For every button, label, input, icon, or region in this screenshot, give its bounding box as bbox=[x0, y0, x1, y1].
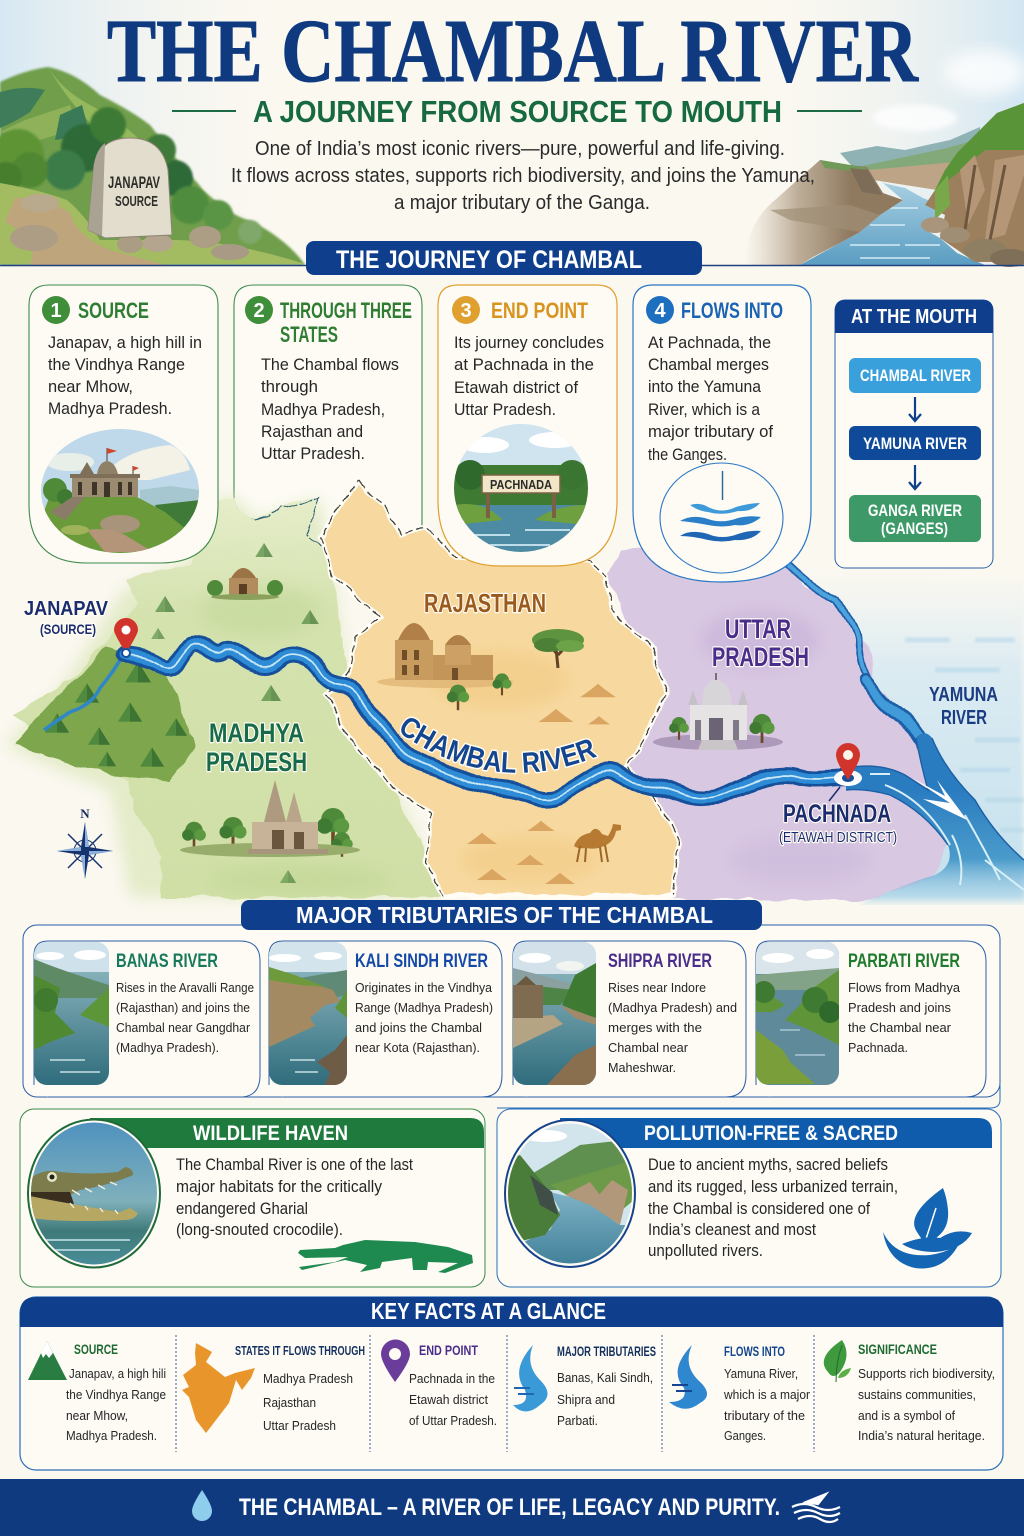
map label: Pachnada: (ETAWAH DISTRICT) bbox=[779, 829, 897, 846]
card: Banas River: Rises in the Aravalli Range bbox=[116, 980, 254, 995]
fact: tributaries: Shipra and bbox=[557, 1393, 615, 1407]
card 3: end point bbox=[438, 285, 617, 566]
map: state borders bbox=[320, 482, 679, 897]
map label: Janapav: (SOURCE) bbox=[40, 621, 96, 637]
box: Yamuna River bbox=[849, 426, 981, 460]
fact: end point: of Uttar Pradesh. bbox=[409, 1414, 497, 1428]
fact: end point: Pachnada in the bbox=[409, 1372, 495, 1386]
header scene: sky bbox=[0, 0, 1024, 265]
panel header: AT THE MOUTH bbox=[851, 306, 977, 328]
card: Kali Sindh River: and joins the Chambal bbox=[355, 1020, 482, 1035]
card: Shipra River: Maheshwar. bbox=[608, 1060, 676, 1075]
card: Kali Sindh River: near Kota (Rajasthan). bbox=[355, 1040, 480, 1055]
fact: states: Uttar Pradesh bbox=[263, 1419, 336, 1433]
fact: significance: and is a symbol of bbox=[858, 1409, 956, 1423]
text: the Chambal is considered one of bbox=[648, 1199, 870, 1218]
card 4: flows into: into the Yamuna bbox=[648, 377, 761, 396]
fact: flows into: tributary of the bbox=[724, 1409, 805, 1423]
map label: Rajasthan: RAJASTHAN bbox=[424, 588, 546, 618]
text: India’s cleanest and most bbox=[648, 1220, 816, 1239]
card 2: through three states bbox=[234, 285, 422, 535]
fact: flows into: Yamuna River, bbox=[724, 1367, 798, 1381]
text: and its rugged, less urbanized terrain, bbox=[648, 1177, 898, 1196]
card 1: source: the Vindhya Range bbox=[48, 355, 185, 374]
map label: Madhya Pradesh: MADHYA bbox=[209, 718, 304, 748]
panel: at the mouth bbox=[835, 300, 993, 568]
card: Shipra River: Chambal near bbox=[608, 1040, 689, 1055]
banner: the journey of Chambal: THE JOURNEY OF CHAMBAL bbox=[336, 246, 642, 274]
illustration: Janapav hill with stone bbox=[0, 67, 305, 265]
fact: significance: Supports rich biodiversity, bbox=[858, 1367, 995, 1381]
fact: tributaries bbox=[513, 1344, 656, 1428]
card: Shipra River: merges with the bbox=[608, 1020, 702, 1035]
card: Kali Sindh River: KALI SINDH RIVER bbox=[355, 951, 488, 972]
card 2: through three states: 2 bbox=[253, 300, 265, 322]
card 4: flows into: Chambal merges bbox=[648, 355, 769, 374]
card 2: through three states: through bbox=[261, 377, 318, 396]
card 3: end point: 3 bbox=[460, 300, 472, 322]
fact: source: Madhya Pradesh. bbox=[66, 1429, 157, 1443]
map label: Yamuna River: RIVER bbox=[941, 707, 987, 729]
river: Yamuna bbox=[790, 566, 924, 750]
card: Kali Sindh River: Range (Madhya Pradesh) bbox=[355, 1000, 493, 1015]
card 3: end point: Its journey concludes bbox=[454, 333, 604, 352]
fact: states: STATES IT FLOWS THROUGH bbox=[235, 1343, 365, 1358]
card 4: flows into: 4 bbox=[654, 300, 666, 322]
arrow bbox=[909, 465, 921, 489]
fact: end point bbox=[381, 1340, 497, 1428]
footer banner bbox=[0, 1479, 1024, 1536]
panel header bbox=[90, 1118, 484, 1148]
illustration: Janapav hill on map bbox=[15, 645, 195, 780]
illustration: gorge and river bbox=[745, 103, 1024, 267]
map texture blotches bbox=[200, 585, 870, 895]
icon: compass bbox=[57, 806, 113, 879]
fact: significance: sustains communities, bbox=[858, 1388, 976, 1402]
card 2: through three states: STATES bbox=[280, 322, 338, 347]
panel: wildlife haven bbox=[20, 1109, 485, 1287]
card: Banas River: (Madhya Pradesh). bbox=[116, 1040, 219, 1055]
card: Parbati River: Pradesh and joins bbox=[848, 1000, 951, 1015]
divider line under header bbox=[0, 264, 1024, 266]
fact: flows into bbox=[669, 1343, 810, 1443]
intro text: One of India’s most iconic rivers—pure, powerful and life-giving. bbox=[255, 138, 785, 160]
map label: Pachnada: PACHNADA bbox=[783, 800, 891, 828]
illustration: camel bbox=[574, 824, 621, 862]
card: Banas River: (Rajasthan) and joins the bbox=[116, 1000, 250, 1015]
fact: source: Janapav, a high hili bbox=[69, 1367, 166, 1381]
icon: leaf and water bbox=[883, 1188, 972, 1268]
panel: major tributaries bbox=[23, 900, 1000, 1108]
card 1: source bbox=[29, 285, 218, 563]
card: Banas River: Chambal near Gangdhar bbox=[116, 1020, 251, 1035]
card: Kali Sindh River: Originates in the Vindhya bbox=[355, 980, 493, 995]
card: Parbati River: the Chambal near bbox=[848, 1020, 952, 1035]
fact: states: Madhya Pradesh bbox=[263, 1372, 353, 1386]
card 1: source: Janapav, a high hill in bbox=[48, 333, 202, 352]
map label: Pachnada bbox=[779, 800, 897, 846]
panel header: KEY FACTS AT A GLANCE bbox=[371, 1298, 606, 1324]
map pin: Pachnada bbox=[829, 743, 862, 801]
panel header bbox=[20, 1297, 1003, 1327]
map: Uttar Pradesh region bbox=[607, 547, 948, 900]
panel: key facts at a glance bbox=[20, 1297, 1003, 1470]
intro text: It flows across states, supports rich biodiversity, and joins the Yamuna, bbox=[231, 165, 815, 187]
text: Due to ancient myths, sacred beliefs bbox=[648, 1155, 888, 1174]
fact: states: Rajasthan bbox=[263, 1396, 316, 1410]
map label: Uttar Pradesh bbox=[712, 614, 809, 672]
map label: Chambal River: CHAMBAL RIVER bbox=[400, 716, 598, 774]
fact: source bbox=[28, 1341, 166, 1443]
fact: source: the Vindhya Range bbox=[66, 1388, 166, 1402]
card: Shipra River: (Madhya Pradesh) and bbox=[608, 1000, 737, 1015]
fact: end point: END POINT bbox=[419, 1342, 478, 1358]
card: Banas River: BANAS RIVER bbox=[116, 951, 218, 972]
card: Shipra River: SHIPRA RIVER bbox=[608, 951, 712, 972]
card: Kali Sindh River bbox=[269, 941, 502, 1097]
fact: significance: SIGNIFICANCE bbox=[858, 1341, 937, 1357]
panel: pollution-free and sacred bbox=[497, 1109, 1001, 1287]
box: Ganga River: GANGA RIVER bbox=[868, 501, 962, 520]
box: Chambal River bbox=[849, 358, 981, 393]
map: Rajasthan region bbox=[320, 482, 679, 897]
card 2: through three states: Madhya Pradesh, bbox=[261, 400, 385, 419]
card 3: end point: END POINT bbox=[491, 298, 588, 323]
subtitle: A JOURNEY FROM SOURCE TO MOUTH bbox=[253, 94, 782, 129]
box: Chambal River: CHAMBAL RIVER bbox=[860, 366, 971, 385]
intro text bbox=[231, 138, 815, 214]
icon: water waves bbox=[660, 463, 783, 573]
text: endangered Gharial bbox=[176, 1199, 308, 1218]
map label: Yamuna River bbox=[929, 684, 998, 729]
card 1: source: Madhya Pradesh. bbox=[48, 399, 172, 418]
card 4: flows into: FLOWS INTO bbox=[681, 298, 783, 323]
map pin: source bbox=[114, 618, 138, 657]
image: gorge bbox=[505, 1120, 635, 1268]
fact: significance: India’s natural heritage. bbox=[858, 1429, 985, 1443]
illustration: savanna tree bbox=[532, 629, 584, 668]
map label: Madhya Pradesh bbox=[206, 718, 307, 777]
card 4: flows into bbox=[633, 285, 811, 582]
illustration: desert dunes bbox=[467, 684, 616, 884]
text bbox=[176, 1155, 413, 1239]
illustration: Rajasthan fort bbox=[377, 623, 513, 710]
fact: states bbox=[182, 1343, 365, 1433]
fact: significance bbox=[824, 1340, 995, 1443]
fact: flows into: which is a major bbox=[723, 1388, 810, 1402]
text: The Chambal River is one of the last bbox=[176, 1155, 413, 1174]
card: Shipra River: Rises near Indore bbox=[608, 980, 706, 995]
fact: tributaries: Parbati. bbox=[557, 1414, 598, 1428]
card: Banas River bbox=[34, 941, 260, 1097]
illustration: small temple bbox=[207, 568, 283, 600]
map label: Uttar Pradesh: UTTAR bbox=[725, 614, 791, 644]
image: Pachnada sign bbox=[454, 424, 588, 555]
arrow bbox=[909, 397, 921, 421]
river: delta confluence bbox=[846, 733, 1024, 905]
image: gharial bbox=[28, 1120, 162, 1268]
fact: flows into: Ganges. bbox=[724, 1429, 766, 1443]
box: Ganga River: (GANGES) bbox=[881, 519, 948, 538]
card: Parbati River bbox=[753, 941, 986, 1097]
fact: tributaries: Banas, Kali Sindh, bbox=[557, 1371, 653, 1385]
fact: flows into: FLOWS INTO bbox=[724, 1343, 785, 1359]
fact: tributaries: MAJOR TRIBUTARIES bbox=[557, 1344, 656, 1359]
illustration: scattered shrubs in Madhya Pradesh bbox=[151, 543, 319, 883]
map: Madhya Pradesh region bbox=[13, 498, 444, 897]
card 1: source: near Mhow, bbox=[48, 377, 133, 396]
panel header: POLLUTION-FREE & SACRED bbox=[644, 1122, 898, 1145]
illustration: Uttar Pradesh white temple bbox=[653, 673, 783, 750]
card 4: flows into: the Ganges. bbox=[648, 445, 727, 464]
card 4: flows into: At Pachnada, the bbox=[648, 333, 771, 352]
card 4: flows into: major tributary of bbox=[648, 422, 773, 441]
text: unpolluted rivers. bbox=[648, 1241, 763, 1260]
card: Parbati River: Pachnada. bbox=[848, 1040, 908, 1055]
stone marker: JANAPAV bbox=[108, 173, 160, 192]
fact: source: near Mhow, bbox=[66, 1409, 128, 1423]
text bbox=[648, 1155, 898, 1260]
intro text: a major tributary of the Ganga. bbox=[394, 192, 650, 214]
card 1: source: SOURCE bbox=[78, 298, 149, 323]
card 2: through three states: Rajasthan and bbox=[261, 422, 363, 441]
map: Madhya Pradesh pale wash bbox=[5, 497, 444, 897]
map: sea / Yamuna waters bbox=[790, 565, 1024, 900]
fact: end point: Etawah district bbox=[409, 1393, 489, 1407]
icon: waves bbox=[792, 1494, 840, 1522]
card 2: through three states: THROUGH THREE bbox=[280, 298, 412, 323]
stone marker: SOURCE bbox=[115, 193, 158, 210]
map label: Madhya Pradesh: PRADESH bbox=[206, 747, 307, 777]
card 1: source: 1 bbox=[50, 300, 62, 322]
illustration: Madhya Pradesh temple bbox=[180, 780, 360, 857]
map: Madhya Pradesh top border bbox=[257, 498, 330, 557]
river: Chambal bbox=[124, 643, 850, 799]
image: Pachnada sign: PACHNADA bbox=[490, 478, 552, 492]
card 3: end point: at Pachnada in the bbox=[454, 355, 594, 374]
card 2: through three states: The Chambal flows bbox=[261, 355, 399, 374]
map label: Uttar Pradesh: PRADESH bbox=[712, 642, 809, 672]
map label: Janapav bbox=[24, 598, 109, 637]
card: Parbati River: Flows from Madhya bbox=[848, 980, 961, 995]
map label: Yamuna River: YAMUNA bbox=[929, 684, 998, 706]
card 4: flows into: River, which is a bbox=[648, 400, 760, 419]
card 3: end point: Etawah district of bbox=[454, 378, 578, 397]
card 2: through three states: Uttar Pradesh. bbox=[261, 444, 365, 463]
text: major habitats for the critically bbox=[176, 1177, 382, 1196]
stone marker bbox=[88, 138, 172, 238]
footer banner: THE CHAMBAL – A RIVER OF LIFE, LEGACY AND PURITY. bbox=[239, 1494, 780, 1521]
icon: water drop bbox=[192, 1490, 212, 1521]
map label: Janapav: JANAPAV bbox=[24, 598, 109, 620]
panel header: WILDLIFE HAVEN bbox=[193, 1122, 348, 1145]
panel header bbox=[835, 300, 993, 333]
image: hilltop temple bbox=[40, 428, 200, 554]
card: Shipra River bbox=[513, 941, 746, 1097]
icon: gharial silhouette bbox=[298, 1240, 473, 1273]
banner: MAJOR TRIBUTARIES OF THE CHAMBAL bbox=[296, 902, 713, 928]
text: (long-snouted crocodile). bbox=[176, 1220, 343, 1239]
box: Ganga River bbox=[849, 495, 981, 542]
icon: compass: N bbox=[80, 806, 90, 821]
panel header bbox=[560, 1118, 992, 1148]
card 3: end point: Uttar Pradesh. bbox=[454, 400, 556, 419]
box: Yamuna River: YAMUNA RIVER bbox=[863, 434, 967, 453]
card: Parbati River: PARBATI RIVER bbox=[848, 951, 960, 972]
fact: source: SOURCE bbox=[74, 1341, 118, 1357]
